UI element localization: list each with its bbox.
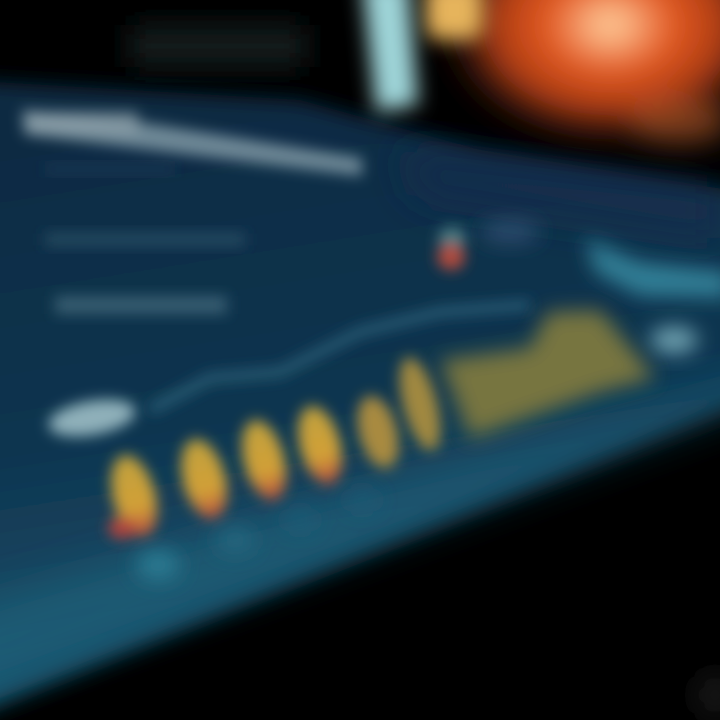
marker: red and yellow dot	[437, 227, 466, 270]
heading: blurred title	[22, 110, 362, 176]
yellow light	[425, 0, 483, 40]
axis labels under bars	[136, 488, 380, 580]
bar 4	[290, 401, 350, 489]
teal shape	[585, 238, 720, 298]
chart label: white blob	[46, 394, 138, 442]
panel: lower edge highlight	[0, 375, 720, 700]
panel: upper right dark shade	[400, 150, 720, 240]
bar 2	[173, 434, 235, 524]
line chart trace	[150, 305, 530, 410]
light blob	[650, 326, 698, 354]
bar 6	[391, 353, 449, 455]
orange light glow	[435, 0, 720, 150]
cyan light bar	[362, 0, 418, 112]
panel: top dark label	[130, 25, 305, 67]
bar 3	[234, 415, 294, 505]
text block: second blurred line	[55, 296, 227, 314]
bar 1	[103, 450, 165, 542]
text block: faint subtitle	[45, 165, 175, 173]
bar chart	[103, 310, 655, 542]
bar cluster	[440, 310, 655, 438]
faint upper-right chart shapes	[480, 220, 540, 244]
bottom right corner glint	[699, 675, 720, 715]
bar 5	[350, 391, 406, 473]
text block: first blurred line	[45, 233, 245, 246]
